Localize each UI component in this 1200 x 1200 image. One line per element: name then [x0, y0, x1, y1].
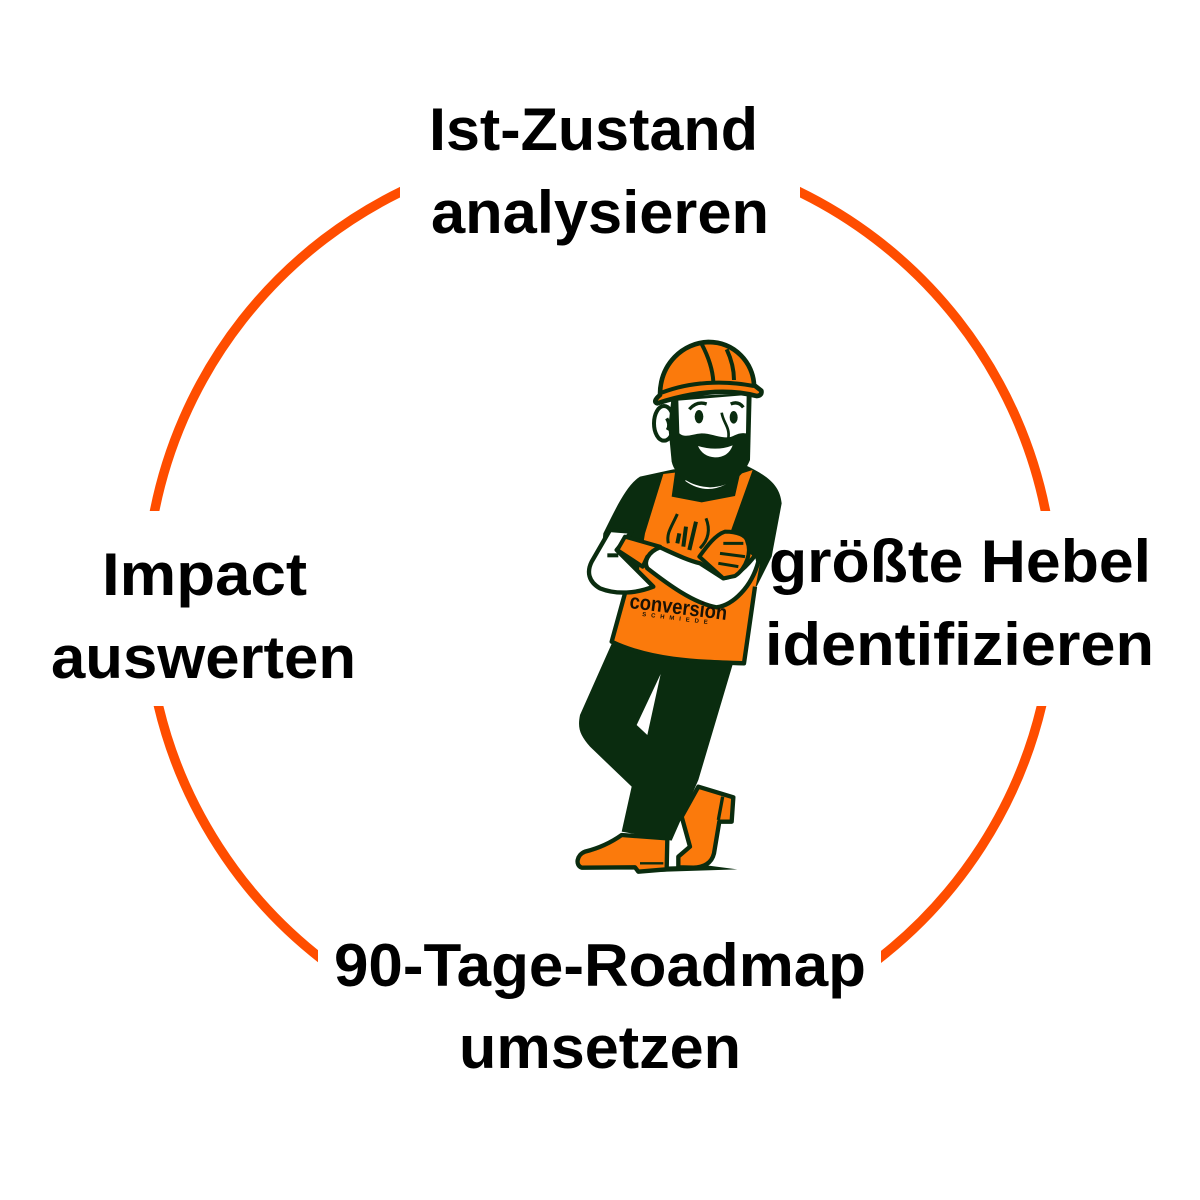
arc: top right [800, 186, 1050, 511]
gap between legs [637, 674, 661, 735]
apron text: schmiede: SCHMIEDE [642, 612, 708, 626]
beard and head [668, 393, 752, 487]
trousers [579, 640, 735, 841]
cycle diagram [52, 106, 1150, 1068]
apron side seams [612, 587, 755, 663]
ear [654, 406, 674, 441]
apron text: conversion: conversion [628, 590, 728, 625]
step: Impact auswerten: auswerten [51, 624, 356, 691]
right boot [678, 787, 733, 868]
step: 90-Tage-Roadmap umsetzen [334, 932, 866, 1081]
right arm [646, 547, 758, 607]
arc: bottom right [881, 706, 1046, 963]
apron logo [668, 514, 708, 550]
collar smile [686, 481, 725, 488]
right hand glove [699, 532, 749, 578]
step: Ist-Zustand analysieren [429, 96, 769, 246]
helmet ribs [662, 344, 754, 393]
step: Impact auswerten: Impact [102, 541, 307, 608]
mascot: construction worker [578, 342, 782, 873]
step: größte Hebel identifizieren: identifizieren [765, 611, 1154, 678]
arc: top left [150, 186, 400, 511]
step: Ist-Zustand analysieren: analysieren [431, 179, 769, 246]
step: größte Hebel identifizieren: größte Hebel [769, 528, 1151, 595]
step: Impact auswerten [51, 541, 356, 691]
step: 90-Tage-Roadmap umsetzen: 90-Tage-Roadmap [334, 932, 866, 999]
mascot legs and boots [578, 640, 737, 873]
eyes [695, 410, 703, 423]
helmet [655, 342, 761, 403]
apron [612, 470, 760, 663]
left glove [617, 537, 660, 567]
eyebrows [689, 403, 743, 409]
step: größte Hebel identifizieren [765, 528, 1154, 678]
step: Ist-Zustand analysieren: Ist-Zustand [429, 96, 758, 163]
left boot [578, 835, 667, 872]
smile [698, 445, 733, 457]
mascot upper body [589, 342, 782, 663]
left sleeve [589, 530, 653, 593]
ground shadow [637, 865, 737, 873]
shirt [600, 465, 782, 593]
nose [722, 413, 729, 438]
arc: bottom left [154, 706, 318, 962]
step: 90-Tage-Roadmap umsetzen: umsetzen [459, 1014, 741, 1081]
face [678, 395, 747, 437]
